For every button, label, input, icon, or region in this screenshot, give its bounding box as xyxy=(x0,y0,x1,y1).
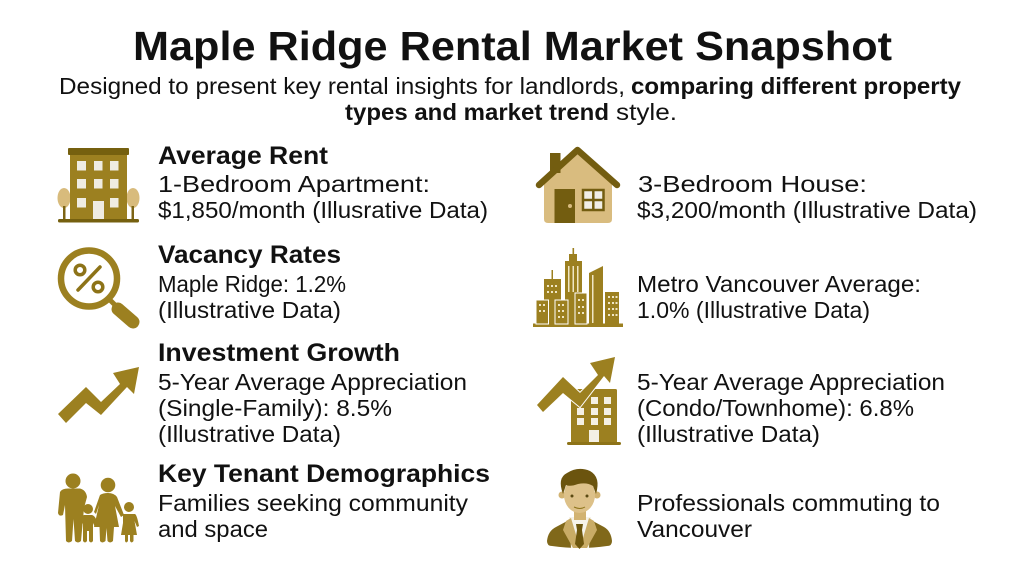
heading: investment growth: Investment Growth xyxy=(158,339,400,367)
icon: apartment building xyxy=(58,148,140,222)
subtitle: comparing different property xyxy=(631,73,961,99)
icon: magnifying glass with percent xyxy=(61,250,133,322)
text: condo appreciation: (Illustrative Data) xyxy=(637,421,820,447)
text: maple ridge vacancy: Maple Ridge: 1.2% xyxy=(158,271,346,297)
icon: growth arrow xyxy=(58,367,139,423)
text: families: Families seeking community xyxy=(158,490,469,516)
text: 1-bedroom apartment: 1-Bedroom Apartment: xyxy=(158,171,430,197)
heading: vacancy rates: Vacancy Rates xyxy=(158,241,341,269)
subtitle xyxy=(59,73,961,125)
text: families: and space xyxy=(158,516,268,542)
icon: professional xyxy=(547,469,612,549)
text: condo appreciation: 5-Year Average Appreciation xyxy=(637,369,945,395)
title: Maple Ridge Rental Market Snapshot xyxy=(133,23,892,69)
icon: family xyxy=(58,474,139,542)
text: single-family appreciation xyxy=(158,369,467,447)
text: 1-bedroom apartment xyxy=(158,171,488,223)
text: families xyxy=(158,490,469,542)
text: 3-bedroom house: $3,200/month (Illustrative Data) xyxy=(637,197,977,223)
text: single-family appreciation: 5-Year Average Appreciation xyxy=(158,369,467,395)
icon: growth arrow over building xyxy=(537,357,621,445)
icon: city skyline xyxy=(533,248,623,327)
text: maple ridge vacancy: (Illustrative Data) xyxy=(158,297,341,323)
text: professionals: Professionals commuting to xyxy=(637,490,940,516)
text: 3-bedroom house: 3-Bedroom House: xyxy=(638,171,867,197)
icon: house xyxy=(539,150,617,223)
text: professionals xyxy=(637,490,940,542)
text: metro vancouver vacancy xyxy=(637,271,921,323)
text: condo appreciation: (Condo/Townhome): 6.8% xyxy=(637,395,914,421)
heading: average rent: Average Rent xyxy=(158,142,329,170)
text: single-family appreciation: (Single-Family): 8.5% xyxy=(158,395,392,421)
subtitle: style. xyxy=(616,99,677,125)
subtitle: types and market trend xyxy=(345,99,609,125)
subtitle: Designed to present key rental insights for landlords, xyxy=(59,73,625,99)
text: metro vancouver vacancy: Metro Vancouver Average: xyxy=(637,271,921,297)
text: maple ridge vacancy xyxy=(158,271,346,323)
text: metro vancouver vacancy: 1.0% (Illustrative Data) xyxy=(637,297,870,323)
text: single-family appreciation: (Illustrative Data) xyxy=(158,421,341,447)
text: 3-bedroom house xyxy=(637,171,977,223)
text: professionals: Vancouver xyxy=(637,516,752,542)
text: 1-bedroom apartment: $1,850/month (Illusrative Data) xyxy=(158,197,488,223)
text: condo appreciation xyxy=(637,369,945,447)
heading: key tenant demographics: Key Tenant Demographics xyxy=(158,460,490,488)
